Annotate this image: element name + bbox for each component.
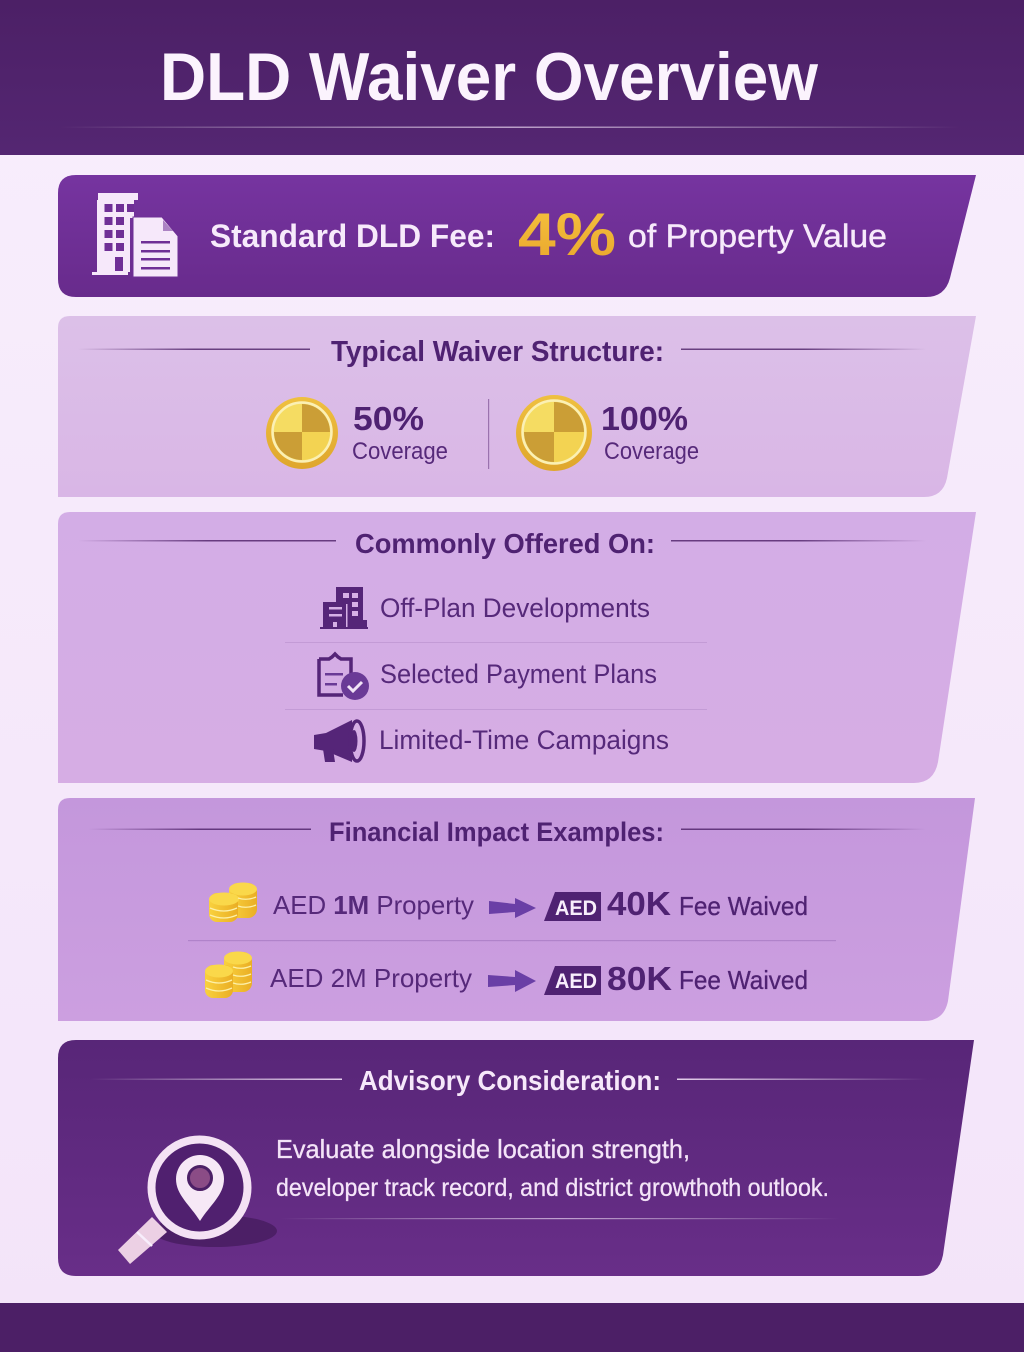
coin: 100%: [516, 395, 592, 471]
icon: building and document: [92, 193, 178, 277]
advisory text: Evaluate alongside location strength,: [276, 1134, 690, 1164]
advisory text: [276, 1134, 829, 1202]
AED tag: AED: [555, 970, 597, 993]
icon: clipboard check: [319, 654, 369, 700]
100% coverage: Coverage: [604, 438, 699, 465]
coin: 50%: [266, 397, 338, 469]
row: AED 1M: [209, 882, 808, 922]
row: AED 1M: Fee Waived: [679, 891, 808, 921]
heading: Advisory Consideration:: [359, 1065, 661, 1096]
heading: Typical Waiver Structure:: [331, 336, 664, 368]
item: campaigns: Limited-Time Campaigns: [379, 725, 669, 755]
50% coverage: Coverage: [352, 438, 448, 465]
advisory text: developer track record, and district growthoth outlook.: [276, 1174, 829, 1202]
50% coverage: [352, 400, 448, 465]
icon: coins: [209, 882, 257, 922]
row: AED 2M: 80K: [607, 960, 672, 997]
title: DLD Waiver Overview: [160, 39, 819, 115]
icon: megaphone: [314, 720, 364, 762]
panel: financial impact: [58, 798, 975, 1021]
fee label: Standard DLD Fee:: [210, 218, 495, 254]
100% coverage: [601, 400, 699, 465]
header band: [0, 0, 1024, 155]
row: AED 2M: Fee Waived: [679, 965, 808, 995]
panel: commonly offered on: [58, 512, 976, 783]
100% coverage: 100%: [601, 400, 688, 437]
row: AED 2M: AED 2M Property: [270, 963, 472, 993]
arrow: [488, 970, 536, 992]
panel: advisory consideration: [58, 1040, 974, 1276]
item: payment plans: Selected Payment Plans: [380, 659, 657, 689]
row: AED 2M: [205, 952, 808, 998]
footer band: [0, 1303, 1024, 1352]
heading: Commonly Offered On:: [355, 528, 655, 559]
icon: coins: [205, 952, 252, 998]
row: AED 1M: 40K: [607, 885, 671, 922]
50% coverage: 50%: [353, 400, 424, 437]
icon: magnifier with map pin: [118, 1140, 277, 1264]
icon: buildings: [320, 587, 368, 629]
AED tag: AED: [555, 897, 597, 920]
row: AED 1M: AED 1M Property: [273, 890, 474, 920]
panel: typical waiver structure: [58, 316, 976, 497]
heading: Financial Impact Examples:: [329, 817, 664, 847]
arrow: [489, 898, 536, 918]
of property value: of Property Value: [628, 218, 887, 254]
AED tag: [544, 892, 601, 921]
item: off-plan: Off-Plan Developments: [380, 593, 650, 623]
panel: standard DLD fee: [58, 175, 976, 297]
4% value: 4%: [518, 201, 616, 268]
AED tag: [544, 966, 601, 995]
